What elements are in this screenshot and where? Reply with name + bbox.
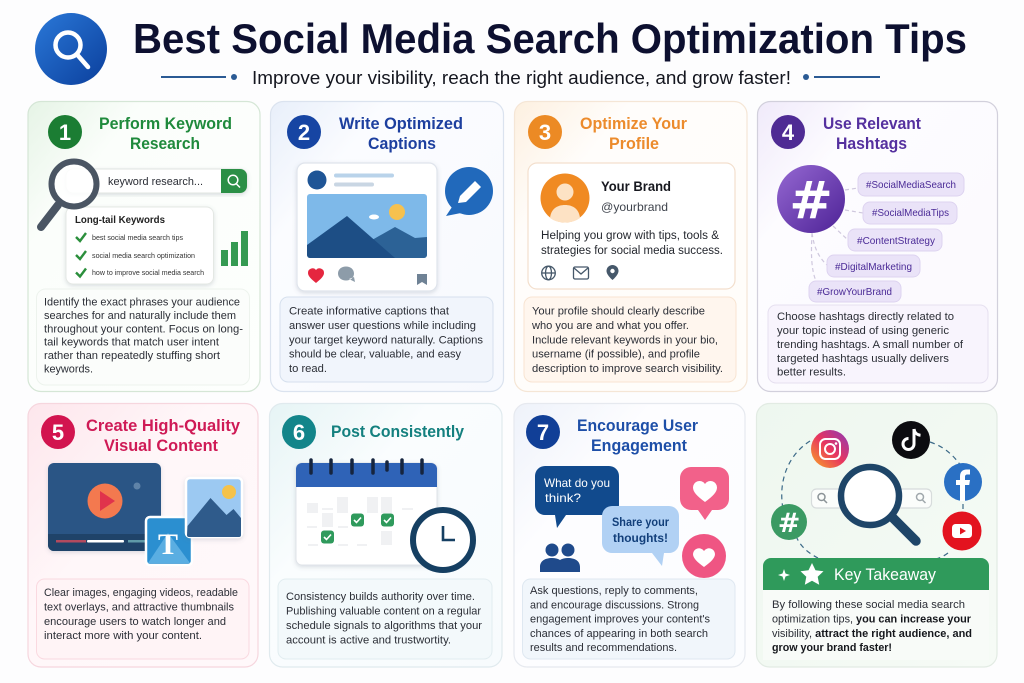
icon: heart circle bbox=[682, 534, 726, 578]
text tile bbox=[146, 517, 192, 565]
description bbox=[768, 305, 988, 383]
badge 5 bbox=[41, 415, 75, 449]
text tile: T bbox=[158, 528, 178, 561]
dashed orbit bbox=[782, 441, 963, 559]
heading: Profile bbox=[609, 134, 659, 153]
badge 7: 7 bbox=[537, 420, 549, 445]
hashtag chips bbox=[809, 173, 964, 302]
badge 1 bbox=[48, 115, 82, 149]
icon: people bbox=[540, 544, 580, 572]
badge 3 bbox=[528, 115, 562, 149]
description: Choose hashtags directly related to bbox=[777, 311, 954, 323]
heading: Use Relevant bbox=[823, 114, 921, 133]
panel: tip 4 hashtags bbox=[758, 102, 998, 392]
heading: Perform Keyword bbox=[99, 114, 232, 133]
badge 5: 5 bbox=[52, 420, 64, 445]
subtitle: Improve your visibility, reach the right audience, and grow faster! bbox=[252, 67, 791, 88]
bar chart bbox=[221, 231, 248, 266]
profile card: Helping you grow with tips, tools & bbox=[541, 230, 719, 242]
description: and encourage discussions. Strong bbox=[530, 600, 699, 612]
icon: hashtag bbox=[771, 504, 807, 540]
connector lines bbox=[811, 188, 863, 281]
description bbox=[36, 289, 250, 385]
icon: large magnifier bbox=[841, 467, 916, 541]
heading: Visual Content bbox=[104, 436, 218, 455]
panel: tip 1 keyword research bbox=[28, 102, 260, 392]
speech bubble light: thoughts! bbox=[613, 531, 668, 545]
profile card: @yourbrand bbox=[601, 200, 668, 214]
heading bbox=[577, 416, 698, 455]
description: Ask questions, reply to comments, bbox=[530, 585, 698, 597]
badge 6 bbox=[282, 415, 316, 449]
icon: search logo bbox=[35, 13, 107, 85]
description: tail keywords that match user intent bbox=[44, 337, 219, 349]
badge 4 bbox=[771, 115, 805, 149]
badge 2 bbox=[287, 115, 321, 149]
badge 3: 3 bbox=[539, 120, 551, 145]
description bbox=[522, 579, 735, 659]
speech bubble dark: think? bbox=[545, 491, 581, 505]
long-tail keywords list: social media search optimization bbox=[92, 251, 195, 260]
icon: hashtag circle: # bbox=[789, 171, 833, 231]
description: encourage users to watch longer and bbox=[44, 616, 226, 628]
description: rather than repeatedly stuffing short bbox=[44, 350, 220, 362]
description: chances of appearing in both search bbox=[530, 628, 708, 640]
search bar bbox=[66, 169, 247, 193]
description: Consistency builds authority over time. bbox=[286, 591, 475, 603]
hashtag chips: #DigitalMarketing bbox=[835, 261, 912, 273]
description: Identify the exact phrases your audience bbox=[44, 296, 240, 308]
icon: magnifier bbox=[41, 162, 96, 227]
description: Your profile should clearly describe bbox=[532, 306, 705, 318]
description: username (if possible), and profile bbox=[532, 349, 700, 361]
heading: Captions bbox=[368, 134, 436, 153]
description: text overlays, and attractive thumbnails bbox=[44, 602, 235, 614]
hashtag chips: #ContentStrategy bbox=[857, 235, 936, 247]
key takeaway banner: Key Takeaway bbox=[834, 565, 936, 584]
heading: Engagement bbox=[591, 436, 687, 455]
takeaway text bbox=[763, 590, 989, 660]
description: account is active and trustwortity. bbox=[286, 634, 451, 646]
heading bbox=[823, 114, 921, 153]
icon: tiktok bbox=[892, 421, 930, 459]
panel: tip 5 visual content bbox=[28, 404, 258, 667]
description: searches for and naturally include them bbox=[44, 310, 236, 322]
hashtag chips: #GrowYourBrand bbox=[817, 286, 892, 298]
long-tail keywords list: best social media search tips bbox=[92, 233, 183, 242]
panel: tip 2 captions bbox=[270, 102, 504, 392]
description: to read. bbox=[289, 363, 327, 375]
hashtag chips: #SocialMediaSearch bbox=[866, 179, 956, 191]
speech bubble light: Share your bbox=[612, 515, 669, 529]
panel: tip 6 post consistently bbox=[270, 404, 502, 667]
panel: key takeaway bbox=[756, 404, 997, 667]
key takeaway banner bbox=[763, 558, 989, 590]
description: interact more with your content. bbox=[44, 630, 202, 642]
description: should be clear, valuable, and easy bbox=[289, 349, 462, 361]
description: Include relevant keywords in your bio, bbox=[532, 334, 718, 346]
description bbox=[36, 579, 249, 659]
heading bbox=[580, 114, 687, 153]
description: trending hashtags. A small number of bbox=[777, 339, 964, 351]
profile card bbox=[528, 163, 735, 289]
hashtag chips: #SocialMediaTips bbox=[872, 207, 949, 219]
description: your topic instead of using generic bbox=[777, 325, 950, 337]
profile card: strategies for social media success. bbox=[541, 245, 723, 257]
takeaway text: By following these social media search bbox=[772, 599, 965, 611]
takeaway text: grow your brand faster! bbox=[772, 642, 892, 654]
description: engagement improves your content's bbox=[530, 614, 711, 626]
icon: heart tile bbox=[680, 467, 729, 520]
video player bbox=[48, 463, 161, 551]
heading bbox=[339, 114, 463, 153]
heading: Optimize Your bbox=[580, 114, 687, 133]
speech bubble dark bbox=[535, 466, 619, 528]
long-tail keywords list: how to improve social media search bbox=[92, 268, 204, 277]
panel: tip 7 engagement bbox=[514, 404, 745, 667]
description: targeted hashtags usually delivers bbox=[777, 353, 950, 365]
heading: Write Optimized bbox=[339, 114, 463, 133]
icon: youtube bbox=[942, 512, 982, 550]
description: who you are and what you offer. bbox=[531, 320, 689, 332]
badge 7 bbox=[526, 415, 560, 449]
icon: clock bbox=[413, 510, 473, 570]
description: Clear images, engaging videos, readable bbox=[44, 587, 238, 599]
icon: instagram bbox=[811, 430, 849, 468]
description: schedule signals to algorithms that your bbox=[286, 620, 482, 632]
heading bbox=[86, 416, 241, 455]
description bbox=[278, 579, 492, 659]
heading bbox=[99, 114, 232, 153]
heading: Research bbox=[130, 134, 200, 153]
takeaway text: optimization tips, you can increase your bbox=[772, 614, 972, 626]
badge 6: 6 bbox=[293, 420, 305, 445]
description: keywords. bbox=[44, 363, 93, 375]
badge 2: 2 bbox=[298, 120, 310, 145]
social post mockup bbox=[297, 163, 437, 291]
profile card: Your Brand bbox=[601, 178, 671, 194]
calendar bbox=[296, 460, 437, 565]
search bar: keyword research... bbox=[108, 176, 203, 188]
description: better results. bbox=[777, 366, 846, 378]
description: answer user questions while including bbox=[289, 320, 476, 332]
description: throughout your content. Focus on long- bbox=[44, 323, 243, 335]
description: Publishing valuable content on a regular bbox=[286, 606, 481, 618]
icon: pencil speech bubble bbox=[445, 167, 493, 216]
description: results and recommendations. bbox=[530, 642, 677, 654]
speech bubble light bbox=[602, 506, 679, 566]
panel: tip 3 profile bbox=[514, 102, 747, 392]
description: Create informative captions that bbox=[289, 306, 449, 318]
badge 1: 1 bbox=[59, 120, 71, 145]
image tile bbox=[186, 478, 242, 537]
icon: hashtag circle bbox=[777, 165, 845, 233]
heading: Create High-Quality bbox=[86, 416, 241, 435]
title: Best Social Media Search Optimization Tips bbox=[133, 15, 967, 62]
heading: Post Consistently bbox=[331, 422, 464, 441]
mini search bar bbox=[812, 489, 932, 508]
heading: Hashtags bbox=[836, 134, 907, 153]
description: your target keyword naturally. Captions bbox=[289, 334, 484, 346]
takeaway text: visibility, attract the right audience, and bbox=[772, 628, 972, 640]
long-tail keywords list: Long-tail Keywords bbox=[75, 215, 165, 226]
icon: facebook bbox=[944, 463, 982, 501]
speech bubble dark: What do you bbox=[544, 476, 610, 490]
header bbox=[35, 13, 967, 88]
description bbox=[524, 297, 736, 382]
heading: Encourage User bbox=[577, 416, 698, 435]
icon: hashtag: # bbox=[778, 508, 800, 539]
description: description to improve search visibility. bbox=[532, 363, 723, 375]
long-tail keywords list bbox=[66, 207, 214, 284]
description bbox=[280, 297, 493, 382]
badge 4: 4 bbox=[782, 120, 795, 145]
